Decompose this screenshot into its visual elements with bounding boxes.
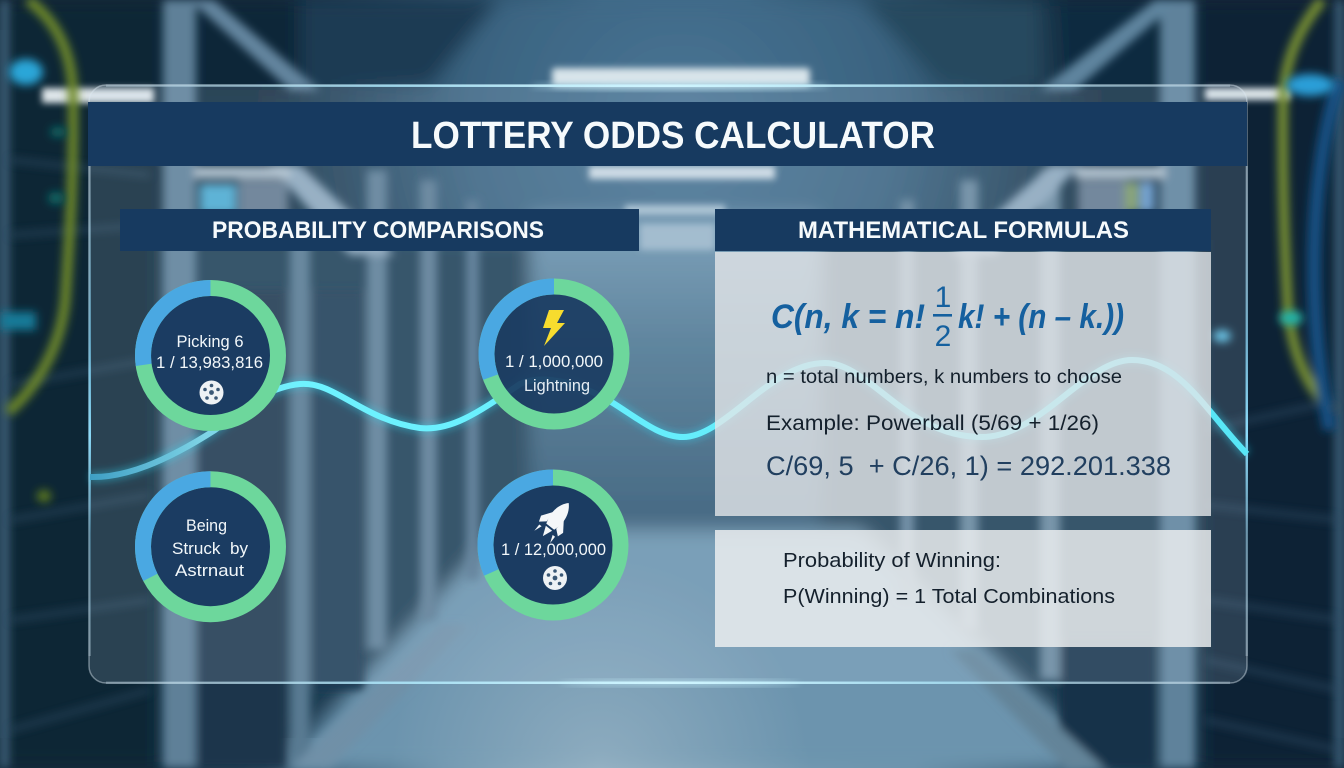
shelf lines — [10, 160, 1340, 750]
winning label: Probability of Winning: — [783, 549, 1001, 572]
ring: rocket — [486, 478, 620, 612]
floor diagonal edges — [290, 625, 470, 768]
combination formula: 1 — [935, 281, 951, 314]
heading: probability comparisons — [120, 209, 639, 251]
panel: formula card — [715, 252, 1211, 516]
heading: mathematical formulas — [715, 209, 1211, 251]
ring: lightning: 1 / 1,000,000 — [505, 353, 603, 371]
ring: struck by astronaut — [143, 479, 278, 614]
ceiling frames — [190, 0, 320, 90]
pillars — [0, 0, 9, 768]
panel: glass card — [88, 82, 1248, 686]
panel: probability of winning — [715, 530, 1211, 647]
powerball result: C/69, 5 + C/26, 1) = 292.201.338 — [766, 451, 1171, 481]
ring: picking 6: Picking 6 — [176, 333, 244, 351]
ring: lightning: Lightning — [524, 377, 590, 395]
dark rack doors — [198, 290, 286, 768]
heading: mathematical formulas: MATHEMATICAL FORMULAS — [798, 217, 1129, 244]
ring: struck by astronaut: Struck by — [172, 540, 249, 558]
heading: probability comparisons: PROBABILITY COMPARISONS — [212, 217, 544, 244]
icon: rocket — [531, 494, 580, 546]
variable definition: n = total numbers, k numbers to choose — [766, 366, 1122, 388]
ceiling lights — [552, 68, 810, 86]
ring: picking 6: 1 / 13,983,816 — [156, 354, 263, 372]
title: LOTTERY ODDS CALCULATOR — [411, 115, 935, 157]
combination formula — [771, 281, 1124, 353]
icon: lottery ball — [200, 380, 224, 404]
ring: struck by astronaut: Being — [186, 517, 227, 535]
icon: lottery ball — [543, 566, 567, 590]
ring: struck by astronaut: Astrnaut — [175, 562, 244, 580]
winning formula: P(Winning) = 1 Total Combinations — [783, 585, 1115, 608]
combination formula: k! + (n – k.)) — [958, 298, 1124, 336]
combination formula: C(n, k = n! — [771, 298, 925, 336]
ring: rocket: 1 / 12,000,000 — [501, 541, 606, 559]
ring: lightning — [486, 286, 622, 422]
combination formula: 2 — [935, 320, 951, 353]
cables — [8, 0, 1340, 430]
icon: lightning bolt — [543, 310, 565, 346]
data wave line — [90, 360, 1247, 477]
powerball example: Example: Powerball (5/69 + 1/26) — [766, 412, 1099, 435]
title bar — [88, 102, 1247, 166]
ring: picking 6 — [143, 288, 278, 423]
